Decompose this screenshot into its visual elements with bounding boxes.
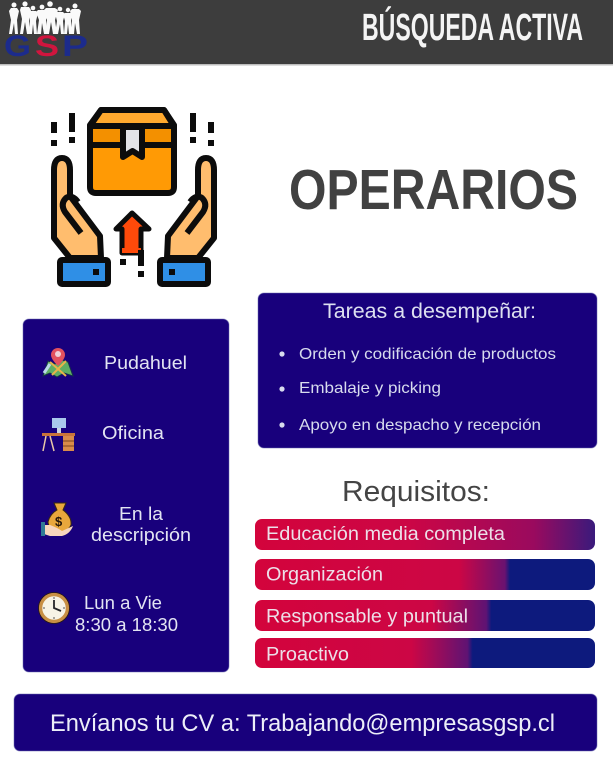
logo lettering: S — [35, 30, 59, 63]
task list: Apoyo en despacho y recepción — [299, 417, 541, 434]
icon: left hand — [54, 158, 108, 284]
schedule text: 8:30 a 18:30 — [75, 614, 178, 635]
icon: group of people silhouettes — [9, 1, 81, 34]
requirement bar: education: Educación media completa — [266, 524, 505, 545]
requirement bar: organization: Organización — [266, 564, 383, 586]
task list: Embalaje y picking — [299, 380, 441, 397]
icon: office desk — [42, 418, 75, 451]
panel: job details — [23, 319, 229, 672]
task list: Orden y codificación de productos — [299, 346, 556, 363]
panel: contact call to action — [14, 694, 597, 751]
panel: tasks — [258, 293, 597, 448]
icon: money bag in hand: $ — [55, 514, 63, 529]
icon: exclamation marks — [51, 113, 214, 146]
requirement bar: organization — [255, 559, 595, 590]
icon: upward arrow — [116, 213, 149, 277]
logo lettering: G — [4, 30, 31, 63]
icon: clock — [38, 592, 70, 624]
schedule text — [75, 592, 178, 635]
icon: hands holding a package — [51, 110, 214, 284]
requirement bar: proactive — [255, 638, 595, 668]
requirement bar: education — [255, 519, 595, 550]
workplace text: Oficina — [102, 422, 165, 443]
icon: box — [90, 110, 174, 193]
logo lettering: P — [62, 30, 88, 63]
logo lettering — [4, 30, 88, 63]
tasks heading: Tareas a desempeñar: — [323, 300, 536, 323]
requirement bar: responsibility — [255, 600, 595, 631]
salary text: descripción — [91, 524, 191, 545]
logo: GSP — [4, 1, 88, 63]
task list — [279, 346, 556, 434]
schedule text: Lun a Vie — [84, 592, 162, 613]
panel: contact call to action: Envíanos tu CV a: Trabajando@empresasgsp.cl — [50, 710, 555, 737]
icon: map pin — [43, 348, 73, 377]
requirement bar: responsibility: Responsable y puntual — [266, 606, 468, 628]
requirement bar: proactive: Proactivo — [266, 644, 349, 666]
requirements heading: Requisitos: — [342, 476, 490, 508]
salary text — [91, 503, 191, 545]
header band — [0, 0, 613, 66]
salary text: En la — [119, 503, 164, 524]
icon: money bag in hand — [41, 503, 73, 536]
location text: Pudahuel — [104, 352, 187, 373]
icon: right hand — [160, 158, 214, 284]
